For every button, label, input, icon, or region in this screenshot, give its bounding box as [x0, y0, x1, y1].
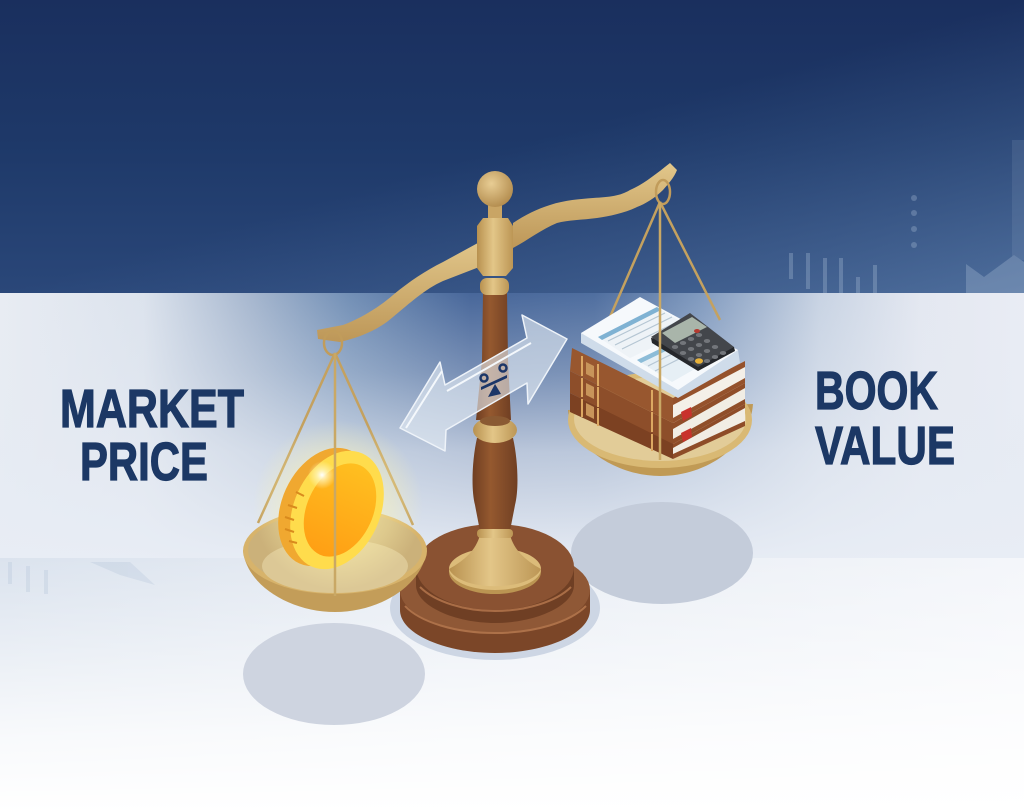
label: book value: [815, 361, 955, 476]
glass double arrow with balance icon: [400, 315, 567, 451]
shadow: right pan: [571, 502, 753, 604]
label: market price: PRICE: [80, 432, 208, 492]
brass foot: [449, 550, 541, 594]
bottom book: [570, 393, 673, 459]
background: middle band: [0, 293, 1024, 558]
left pan with gold coin: [243, 353, 427, 612]
label: book value: VALUE: [815, 416, 955, 476]
spine bands: [582, 356, 652, 451]
central hub and knob: [488, 200, 502, 222]
brass dish: [568, 404, 753, 476]
lower base tier: [400, 590, 590, 653]
shadow: left pan: [243, 623, 425, 725]
right pan with books and calculator: [568, 202, 753, 476]
turned wooden column: [476, 293, 511, 420]
dish: [243, 548, 427, 612]
front string: [334, 353, 336, 596]
label: market price: MARKET: [60, 379, 244, 439]
upper base tier: [416, 567, 574, 623]
brass collars: [477, 529, 513, 538]
beam hooks: [324, 331, 342, 355]
spreadsheet: [598, 307, 692, 358]
scale stand: [400, 293, 590, 653]
balance symbol: [480, 364, 507, 397]
top book: [570, 348, 673, 423]
bookmarks: [681, 407, 692, 442]
middle book: [570, 371, 673, 444]
coin glow: [253, 420, 423, 590]
back strings: [610, 202, 720, 320]
calculator: [651, 313, 735, 371]
label: market price: [60, 379, 244, 492]
decorative bar chart, top right: [789, 140, 1024, 293]
background: navy top panel: [0, 0, 1024, 293]
coin: [260, 433, 402, 584]
front string: [659, 202, 661, 460]
paper stack: [581, 333, 740, 398]
strings: [258, 353, 413, 525]
shadow: scale base: [390, 556, 600, 660]
label: book value: BOOK: [815, 361, 938, 421]
background: lower floor: [0, 558, 1024, 812]
balance beam: [317, 163, 677, 355]
books: [570, 348, 745, 459]
